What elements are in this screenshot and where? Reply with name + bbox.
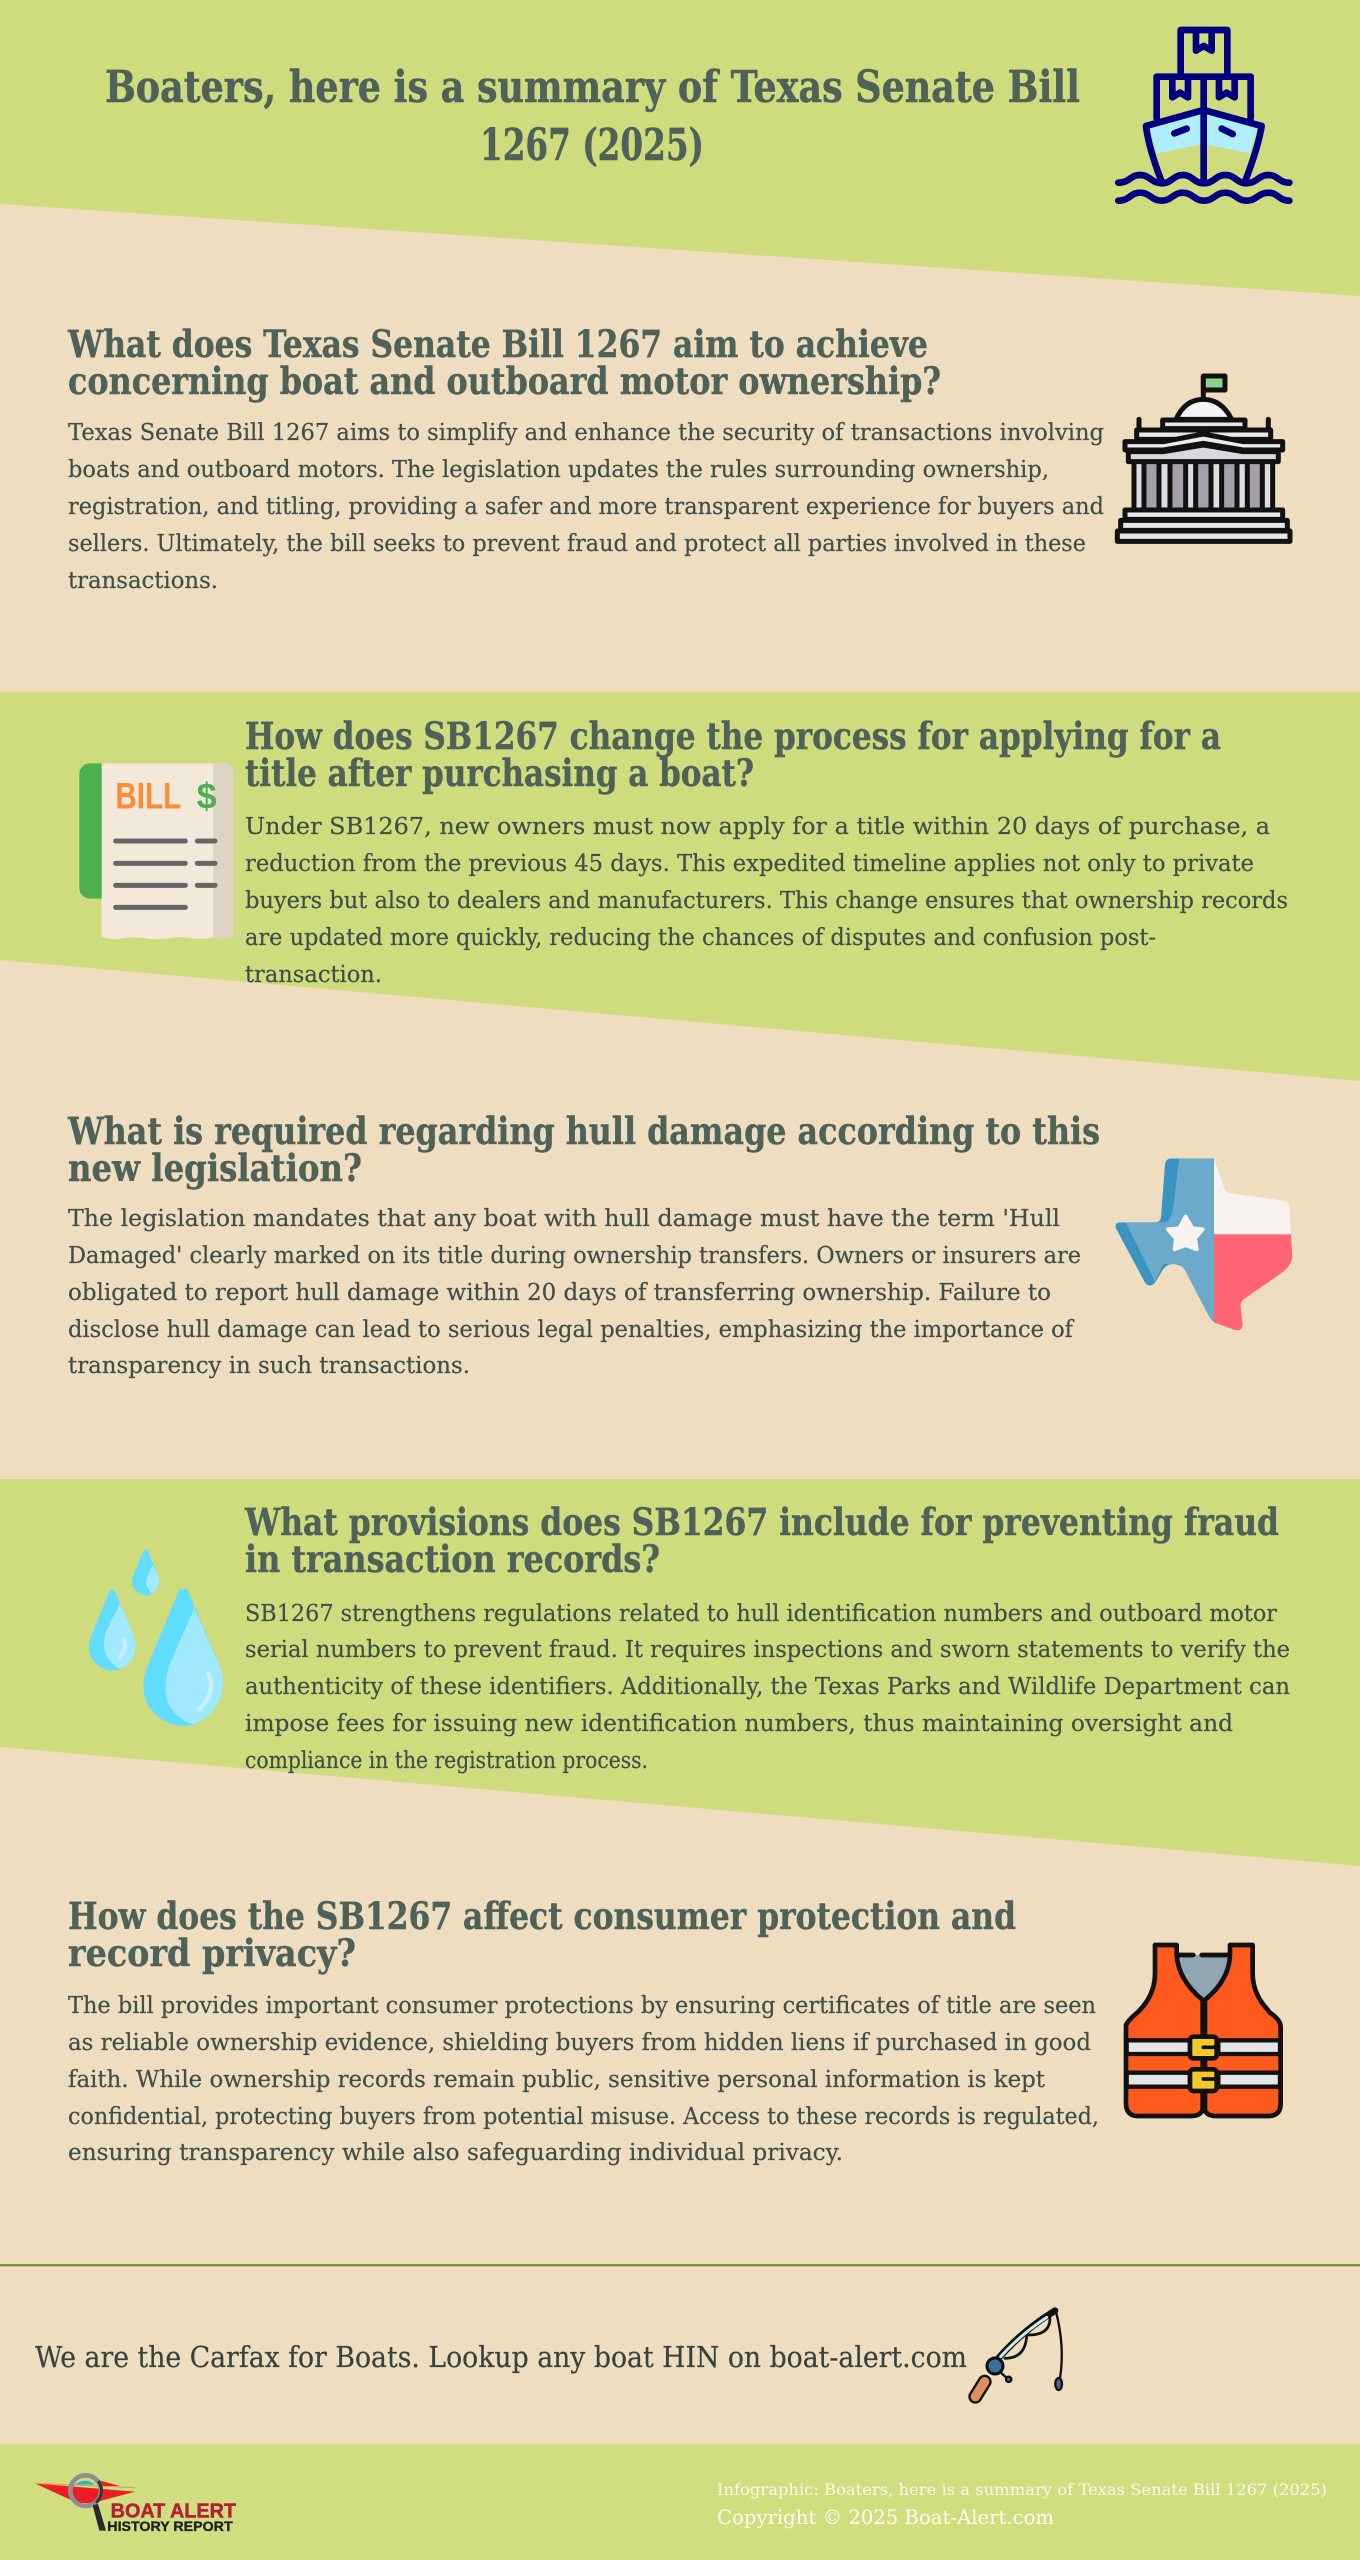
panel: call to action: [35, 2311, 1062, 2397]
heading: hull damage: new legislation?: [68, 1146, 362, 1190]
icon: capitol building: [1117, 376, 1290, 541]
text block: title process: buyers but also to dealers and manufacturers. This change ensures that ownership records: [245, 886, 1288, 914]
heading: title process: title after purchasing a boat?: [245, 751, 754, 795]
text block: hull damage: [68, 1204, 1081, 1379]
text block: hull damage: obligated to report hull damage within 20 days of transferring ownership. Failure to: [68, 1278, 1051, 1306]
logo: Boat Alert History Report: [35, 2475, 236, 2534]
panel: fraud prevention: [0, 1479, 1360, 1866]
icon: bill receipt: [79, 763, 233, 939]
text block: aims: transactions.: [68, 566, 218, 594]
panel: title application process: [0, 692, 1360, 1081]
panel: what the bill aims to achieve: [67, 322, 1290, 594]
text block: consumer protection: as reliable ownership evidence, shielding buyers from hidden liens if purchased in good: [68, 2028, 1091, 2056]
text block: hull damage: transparency in such transactions.: [68, 1351, 470, 1379]
text block: fraud prevention: SB1267 strengthens regulations related to hull identification numbers and outboard motor: [245, 1599, 1278, 1627]
icon: fishing rod: [975, 2311, 1062, 2397]
text block: consumer protection: [68, 1991, 1099, 2166]
text block: consumer protection: The bill provides important consumer protections by ensuring certificates of title are seen: [68, 1991, 1096, 2019]
icon: bill receipt: BILL: [115, 775, 181, 817]
icon: bill receipt: $: [197, 776, 217, 817]
text block: fraud prevention: compliance in the registration process.: [245, 1746, 648, 1774]
text block: aims: Texas Senate Bill 1267 aims to simplify and enhance the security of transactions involving: [68, 418, 1104, 446]
text block: fraud prevention: serial numbers to prevent fraud. It requires inspections and sworn statements to verify the: [245, 1635, 1290, 1663]
icon: water drops: [89, 1549, 223, 1726]
heading: consumer protection: How does the SB1267 affect consumer protection and: [68, 1894, 1016, 1938]
icon: life vest: [1126, 1945, 1281, 2116]
text block: consumer protection: ensuring transparency while also safeguarding individual privacy.: [68, 2138, 843, 2166]
panel: consumer protection: [68, 1894, 1281, 2166]
text block: title process: are updated more quickly, reducing the chances of disputes and confusion post-: [245, 923, 1156, 951]
panel: header: [0, 0, 1360, 296]
icon: Texas map flag: [1110, 1153, 1297, 1334]
text block: aims: [68, 418, 1104, 594]
text block: title process: Under SB1267, new owners must now apply for a title within 20 days of purchase, a: [245, 812, 1270, 840]
heading: hull damage: [67, 1109, 1100, 1190]
footer credit: Copyright © 2025 Boat-Alert.com: [717, 2505, 1054, 2529]
text block: title process: [245, 812, 1288, 988]
text block: consumer protection: faith. While ownership records remain public, sensitive personal information is kept: [68, 2065, 1046, 2093]
logo: Boat Alert History Report: HISTORY REPORT: [107, 2519, 233, 2534]
panel: hull damage: [67, 1109, 1297, 1379]
text block: title process: reduction from the previous 45 days. This expedited timeline applies not only to private: [245, 849, 1254, 877]
text block: aims: sellers. Ultimately, the bill seeks to prevent fraud and protect all parties involved in these: [68, 529, 1086, 557]
heading: title process: [245, 714, 1221, 795]
heading: consumer protection: [68, 1894, 1016, 1975]
footer credit: [717, 2481, 1327, 2529]
text block: fraud prevention: impose fees for issuing new identification numbers, thus maintaining oversight and: [245, 1709, 1233, 1737]
text block: aims: registration, and titling, providing a safer and more transparent experience for buyers and: [68, 492, 1104, 520]
heading: aims: [67, 322, 941, 403]
logo: Boat Alert History Report: BOAT ALERT: [111, 2500, 236, 2523]
heading: hull damage: What is required regarding hull damage according to this: [67, 1109, 1100, 1153]
text block: fraud prevention: [245, 1599, 1290, 1774]
text block: aims: boats and outboard motors. The legislation updates the rules surrounding ownership,: [68, 455, 1049, 483]
heading: fraud prevention: [244, 1500, 1279, 1581]
text block: title process: transaction.: [245, 960, 382, 988]
icon: cargo ship: [1118, 30, 1289, 201]
heading: aims: concerning boat and outboard motor ownership?: [68, 359, 941, 403]
heading: consumer protection: record privacy?: [68, 1931, 356, 1975]
call to action text: We are the Carfax for Boats. Lookup any boat HIN on boat-alert.com: [35, 2340, 967, 2374]
text block: consumer protection: confidential, protecting buyers from potential misuse. Access to these records is regulated,: [68, 2102, 1099, 2130]
text block: fraud prevention: authenticity of these identifiers. Additionally, the Texas Parks and Wildlife Department can: [245, 1672, 1290, 1700]
title: 1267 (2025): [480, 120, 704, 171]
divider line: [0, 2264, 1360, 2267]
title: Boaters, here is a summary of Texas Senate Bill: [105, 62, 1080, 113]
footer credit: Infographic: Boaters, here is a summary of Texas Senate Bill 1267 (2025): [717, 2481, 1327, 2499]
title: [105, 62, 1080, 171]
panel: footer: [0, 2444, 1360, 2560]
text block: hull damage: disclose hull damage can lead to serious legal penalties, emphasizing the importance of: [68, 1315, 1075, 1343]
text block: hull damage: Damaged' clearly marked on its title during ownership transfers. Owners or insurers are: [68, 1241, 1081, 1269]
heading: aims: What does Texas Senate Bill 1267 aim to achieve: [67, 322, 928, 366]
heading: fraud prevention: in transaction records?: [245, 1537, 660, 1581]
text block: hull damage: The legislation mandates that any boat with hull damage must have the term 'Hull: [68, 1204, 1060, 1232]
